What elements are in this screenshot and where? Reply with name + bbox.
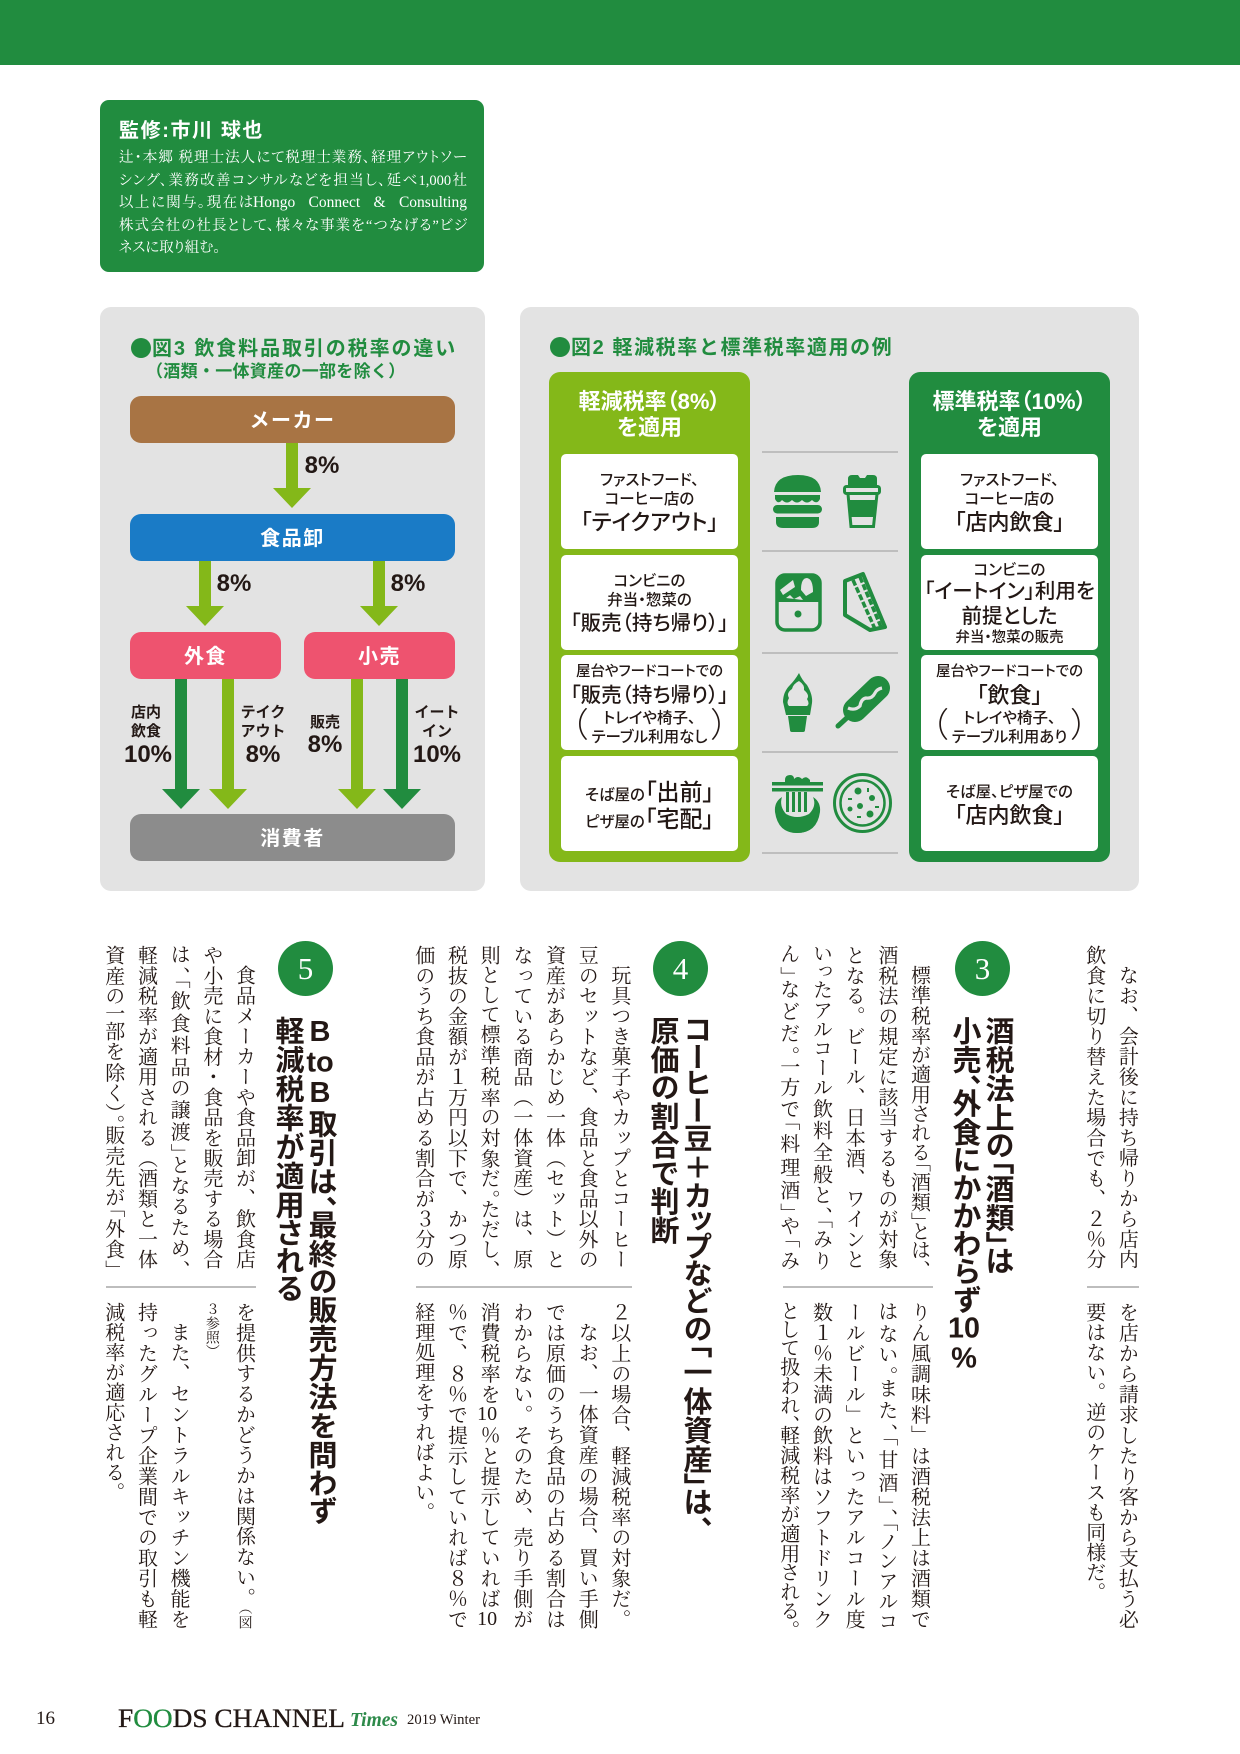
- section heading 3: 酒税法上の「酒類」は: [981, 1016, 1013, 1275]
- body text: continuation column, lower tier: を店から請求したり客から支払う必: [1115, 1302, 1137, 1629]
- body text: section 4, lower tier: では原価のうち食品の占める割合は: [543, 1302, 565, 1629]
- label: dine-in: 店内: [131, 704, 161, 721]
- footer: magazine logo: FOODS CHANNEL: [118, 1704, 345, 1733]
- body text: section 4, upper tier: 価のうち食品が占める割合が３分の: [412, 945, 434, 1269]
- rate: sale: 8%: [308, 731, 342, 758]
- card: takeout: コーヒー店の: [605, 491, 694, 508]
- card: eat-in convenience store: 弁当・惣菜の販売: [955, 630, 1064, 646]
- flow box: restaurant: 外食: [184, 646, 227, 668]
- card: dine-in soba and pizza: そば屋、ピザ屋での: [946, 784, 1073, 800]
- card: food court dining: 「飲食」: [976, 682, 1042, 708]
- body text: section 3, upper tier: 標準税率が適用される「酒類」とは、: [908, 965, 930, 1269]
- flow box: retail: [304, 632, 455, 679]
- section heading 5: B to B 取引は、最終の販売方法を問わず: [304, 1016, 336, 1525]
- rate: dine-in: 10%: [124, 741, 172, 768]
- card: food court sale: 「販売（持ち帰り）」: [570, 684, 729, 706]
- body text: section 4, lower tier: [412, 1302, 631, 1629]
- icon: soft serve: [783, 673, 812, 732]
- icon: pizza: [834, 774, 890, 832]
- body text: section 5, lower tier: 減税率が適応される。: [102, 1302, 124, 1502]
- card: dine-in fast food: 「店内飲食」: [954, 510, 1064, 535]
- figure 3 title: 図3 飲食料品取引の税率の違い: [152, 338, 457, 360]
- body text: section 5, upper tier: [102, 945, 256, 1269]
- card: food court dining: 屋台やフードコートでの: [936, 664, 1083, 680]
- card: food court dining: トレイや椅子、: [963, 710, 1056, 726]
- body text: section 3, upper tier: [777, 945, 930, 1270]
- arrow: dine-in 10%: [162, 679, 200, 809]
- icon: takeout cup: [844, 475, 880, 526]
- arrow: wholesaler to restaurant: [186, 561, 224, 626]
- card: dine-in fast food: [921, 454, 1098, 549]
- card: eat-in convenience store: コンビニの: [974, 562, 1045, 579]
- figure 2 title: 図2 軽減税率と標準税率適用の例: [571, 337, 893, 359]
- column: standard rate 10%: [909, 372, 1110, 862]
- body text: continuation column, lower tier: 要はない。逆のケースも同様だ。: [1083, 1302, 1105, 1602]
- card: eat-in convenience store: [921, 555, 1098, 650]
- section number 5: 5: [298, 951, 313, 986]
- column heading: standard rate: を適用: [977, 415, 1042, 440]
- flow box: maker: [130, 396, 455, 443]
- body text: section 3, lower tier: ールビール」といったアルコール度: [842, 1302, 864, 1629]
- body text: section 5, upper tier: 食品メーカーや食品卸が、飲食店: [232, 965, 254, 1269]
- card: eat-in convenience store: 「イートイン」利用を: [924, 580, 1095, 603]
- figure 3 subtitle: （酒類・一体資産の一部を除く）: [146, 362, 406, 381]
- flow box: wholesaler: 食品卸: [260, 528, 325, 550]
- body text: section 4, upper tier: 豆のセットなど、食品と食品以外の: [575, 945, 597, 1269]
- card: food court dining: [921, 655, 1098, 750]
- card: delivery: [561, 756, 738, 851]
- flow box: consumer: [130, 814, 455, 861]
- arrow: sale 8%: [338, 679, 376, 809]
- card: food court sale: （: [571, 706, 588, 744]
- panel: figure 3 tax rate flow: [100, 307, 485, 891]
- footer: magazine logo: [118, 1704, 480, 1733]
- column heading: reduced rate: を適用: [617, 415, 682, 440]
- card: takeout: 「テイクアウト」: [581, 510, 718, 535]
- section number 4: [653, 941, 708, 996]
- label: eat-in: [414, 704, 460, 740]
- body text: section 3, upper tier: いったアルコール飲料全般と、「みり: [809, 945, 831, 1269]
- rate: takeout: 8%: [246, 741, 280, 768]
- body text: section 5, upper tier: 資産の一部を除く）。販売先が「外食」: [102, 945, 124, 1269]
- body text: section 3, lower tier: はない。また、「甘酒」、「ノンアルコ: [875, 1302, 897, 1629]
- label: takeout: テイク: [241, 704, 285, 721]
- card: food court sale: トレイや椅子、: [603, 710, 696, 726]
- rate: eat-in: 10%: [413, 741, 461, 768]
- card: delivery: そば屋の「出前」: [585, 778, 714, 804]
- section heading 4: [646, 1016, 712, 1531]
- header band: [0, 0, 1240, 65]
- card: food court dining: （: [931, 706, 948, 744]
- body text: continuation column, lower tier: [1083, 1302, 1138, 1629]
- flow arrows: [162, 443, 421, 809]
- card: takeout: ファストフード、: [600, 472, 699, 489]
- food icons column: [762, 451, 898, 854]
- label: eat-in: イン: [422, 723, 452, 740]
- body text: continuation column, upper tier: 飲食に切り替えた場合でも、２％分: [1083, 945, 1105, 1269]
- body text: section 4, upper tier: 資産があらかじめ一体（セット）と: [543, 945, 565, 1269]
- card: food court sale: 屋台やフードコートでの: [576, 664, 723, 680]
- card: dine-in fast food: コーヒー店の: [965, 491, 1054, 508]
- profile text: 株式会社の社長として、様々な事業を“つなげる”ビジ: [119, 218, 467, 234]
- icon: bento box: [777, 575, 820, 630]
- profile text: ネスに取り組む。: [119, 240, 221, 256]
- card: convenience store sale: 「販売（持ち帰り）」: [570, 612, 729, 635]
- profile box: supervisor: [100, 100, 484, 272]
- label: dine-in: 飲食: [131, 723, 161, 740]
- label: eat-in: イート: [414, 704, 460, 721]
- label: takeout: アウト: [240, 723, 286, 740]
- label: dine-in: [131, 704, 161, 740]
- footer: magazine logo: 2019 Winter: [407, 1712, 480, 1728]
- label: takeout: [240, 704, 286, 740]
- flow box: wholesaler: [130, 514, 455, 561]
- column heading: standard rate: 標準税率（10%）: [932, 389, 1087, 414]
- body text: section 5, lower tier: ３参照）: [204, 1302, 219, 1358]
- body text: section 3, upper tier: となる。ビール、日本酒、ワインと: [842, 945, 864, 1269]
- profile heading: 監修:市川 球也: [119, 120, 264, 142]
- section number 4: 4: [673, 951, 688, 986]
- footer: page number: 16: [36, 1708, 55, 1729]
- body text: section 4, upper tier: 税抜の金額が１万円以下で、かつ原: [444, 945, 466, 1269]
- body text: continuation column, upper tier: なお、会計後に持ち帰りから店内: [1115, 965, 1137, 1269]
- profile text: 以上に関与。現在は: [119, 195, 253, 211]
- body text: section 3, lower tier: として扱われ、軽減税率が適用される。: [777, 1302, 799, 1629]
- column: reduced rate 8%: [549, 372, 750, 862]
- profile text: [119, 149, 467, 256]
- body text: section 3, lower tier: 数１％未満の飲料はソフトドリンク: [809, 1302, 831, 1629]
- rate label: maker to wholesaler: 8%: [305, 452, 339, 479]
- body text: section 3, upper tier: 酒税法の規定に該当するものが対象: [875, 945, 897, 1269]
- body text: section 5, upper tier: や小売に食材・食品を販売する場合: [200, 945, 222, 1269]
- card: eat-in convenience store: 前提とした: [962, 605, 1057, 628]
- body text: section 4, upper tier: 玩具つき菓子やカップとコーヒー: [608, 965, 630, 1269]
- body text: section 4, lower tier: ％で、８％で提示していれば８％で: [444, 1302, 466, 1629]
- body text: section 4, lower tier: わからない。そのため、売り手側が: [510, 1302, 532, 1629]
- card: dine-in soba and pizza: [921, 756, 1098, 851]
- section heading 4: 原価の割合で判断: [646, 1016, 678, 1244]
- card: dine-in fast food: ファストフード、: [960, 472, 1059, 489]
- arrow: takeout 8%: [209, 679, 247, 809]
- card: delivery: ピザ屋の「宅配」: [585, 806, 714, 832]
- body text: section 4, upper tier: [412, 945, 631, 1269]
- body text: section 3, lower tier: [777, 1302, 930, 1629]
- body text: section 4, lower tier: 消費税率を 10 ％と提示していれば 10: [477, 1302, 499, 1629]
- flow box: retail: 小売: [358, 646, 401, 668]
- card: convenience store sale: コンビニの: [614, 573, 685, 590]
- card: food court sale: テーブル利用なし: [592, 728, 707, 746]
- column heading: standard rate: [932, 389, 1087, 440]
- icon: burger: [773, 475, 822, 528]
- rate label: wholesaler to restaurant: 8%: [217, 570, 251, 597]
- label: sale: 販売: [310, 714, 340, 731]
- column heading: reduced rate: [579, 389, 720, 440]
- body text: section 3, lower tier: りん風調味料」は酒税法上は酒類で: [908, 1302, 930, 1629]
- section heading 5: [271, 1016, 338, 1525]
- card: food court dining: テーブル利用あり: [952, 728, 1067, 746]
- card: food court sale: ）: [711, 706, 728, 744]
- section heading 4: コーヒー豆＋カップなどの「一体資産」は、: [679, 1016, 711, 1531]
- body text: section 3, upper tier: ん」などだ。一方で「料理酒」や「み: [777, 945, 799, 1269]
- panel: figure 2 examples: [520, 307, 1139, 891]
- icon: soba bowl: [772, 775, 823, 833]
- arrow: maker to wholesaler: [273, 443, 311, 508]
- card: convenience store sale: [561, 555, 738, 650]
- card: food court dining: ）: [1071, 706, 1088, 744]
- section heading 3: [948, 1016, 1014, 1375]
- card: convenience store sale: 弁当・惣菜の: [607, 592, 692, 609]
- card: dine-in soba and pizza: 「店内飲食」: [954, 802, 1064, 828]
- icon: sandwich: [845, 574, 885, 630]
- body text: section 4, lower tier: なお、一体資産の場合、買い手側: [575, 1322, 597, 1629]
- body text: section 5, lower tier: [102, 1302, 256, 1629]
- body text: section 5, lower tier: を提供するかどうかは関係ない。 （図: [232, 1302, 254, 1629]
- profile text: シング、業務改善コンサルなどを担当し、延べ1,000社: [119, 172, 467, 188]
- card: takeout: [561, 454, 738, 549]
- profile text: Hongo Connect & Consulting: [253, 194, 467, 211]
- flow box: restaurant: [130, 632, 281, 679]
- body text: continuation column, upper tier: [1083, 945, 1138, 1269]
- section number 3: 3: [975, 951, 990, 986]
- card: food court sale: [561, 655, 738, 750]
- icon: corn dog: [838, 688, 882, 726]
- section number 5: [278, 941, 333, 996]
- arrow: eat-in 10%: [383, 679, 421, 809]
- flow box: maker: メーカー: [250, 410, 336, 432]
- section number 3: [955, 941, 1010, 996]
- flow box: consumer: 消費者: [260, 828, 325, 850]
- footer: magazine logo: Times: [350, 1709, 398, 1731]
- column heading: reduced rate: 軽減税率（8%）: [579, 389, 720, 414]
- body text: section 4, lower tier: ２以上の場合、軽減税率の対象だ。: [608, 1302, 630, 1629]
- section heading 3: 小売、外食にかかわらず 10 %: [948, 1016, 980, 1375]
- arrow: wholesaler to retail: [360, 561, 398, 626]
- profile text: 辻・本郷 税理士法人にて税理士業務、経理アウトソー: [119, 150, 467, 166]
- body text: section 4, lower tier: 経理処理をすればよい。: [412, 1302, 434, 1522]
- body text: section 5, upper tier: は、「飲食料品の譲渡」となるため、: [167, 945, 189, 1269]
- rate label: wholesaler to retail: 8%: [391, 570, 425, 597]
- body text: section 5, lower tier: 持ったグループ企業間での取引も軽: [134, 1302, 156, 1629]
- body text: section 4, upper tier: 則として標準税率の対象だ。ただし、: [477, 945, 499, 1269]
- section heading 5: 軽減税率が適用される: [271, 1016, 303, 1302]
- body text: section 4, upper tier: なっている商品（一体資産）は、原: [510, 945, 532, 1269]
- body text: section 5, lower tier: また、セントラルキッチン機能を: [167, 1322, 189, 1629]
- body text: section 5, upper tier: 軽減税率が適用される（酒類と一体: [134, 945, 156, 1269]
